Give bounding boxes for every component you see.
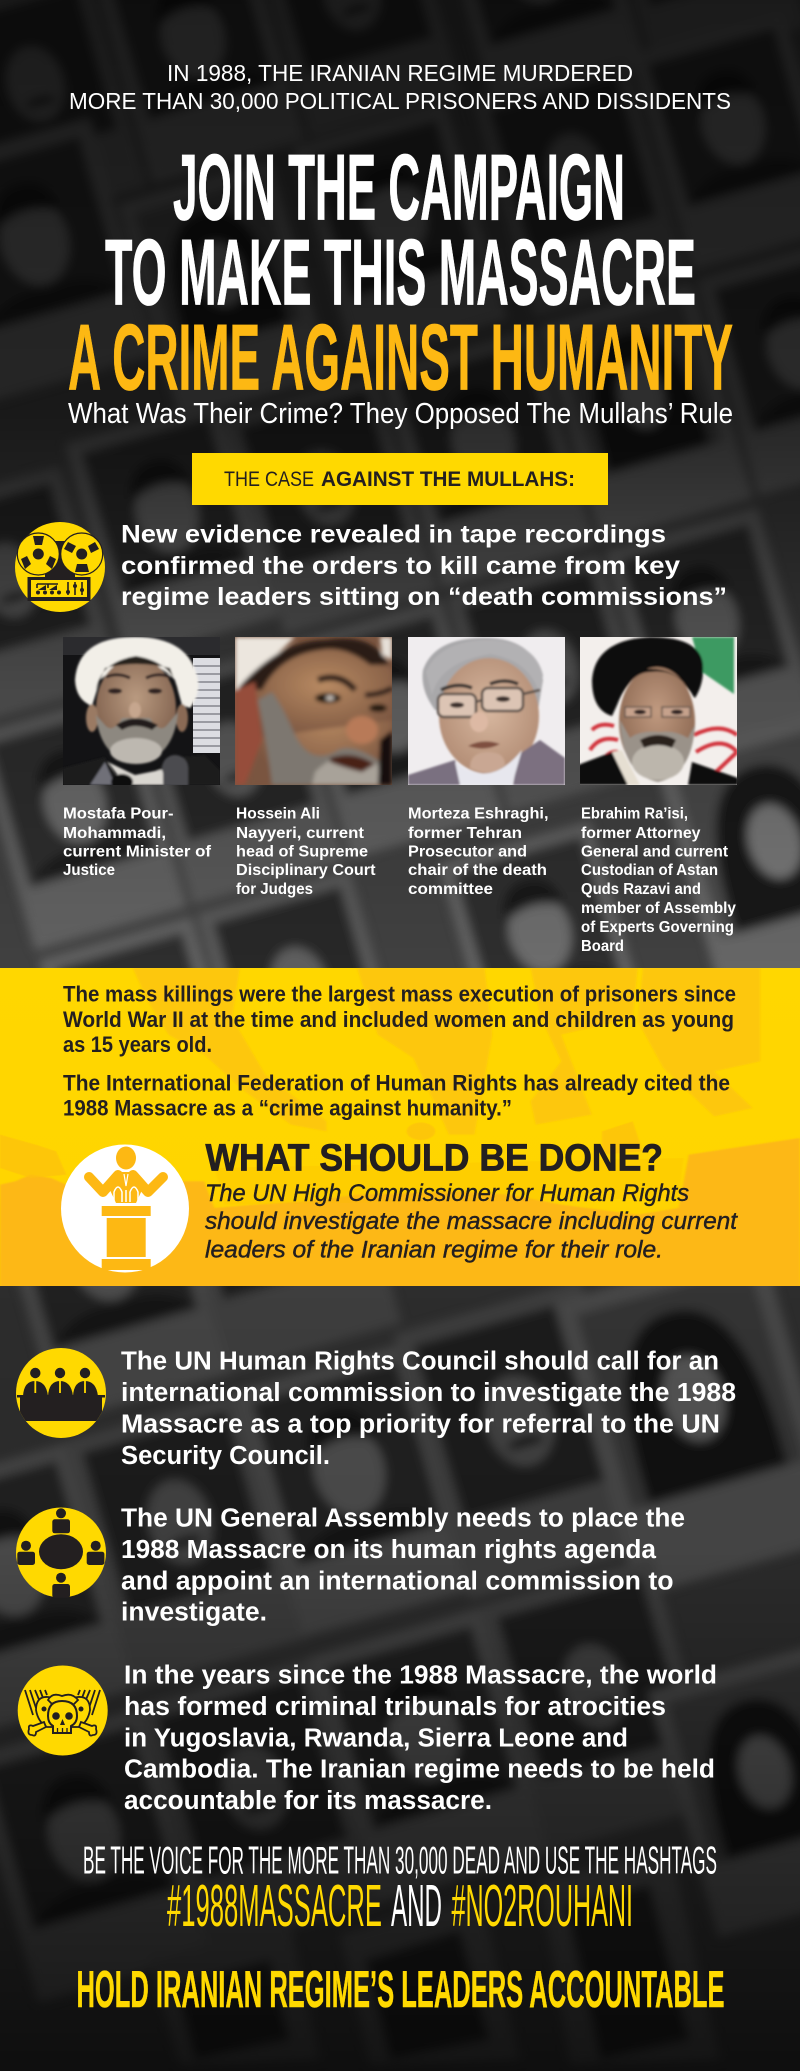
- text: UN Human Rights Council: The UN Human Rights Council should call for an: [121, 1348, 719, 1376]
- captions under photos: [63, 806, 736, 955]
- icon: round table assembly: [16, 1508, 106, 1598]
- text: UN High Commissioner: The UN High Commissioner for Human Rights: [205, 1180, 689, 1207]
- banner: the case against the mullahs: AGAINST THE MULLAHS:: [321, 468, 575, 491]
- icon: speaker at podium: [61, 1144, 189, 1272]
- caption: Morteza Eshraghi: committee: [408, 881, 493, 898]
- icon: tape recorder: [15, 522, 105, 612]
- heading: what should be done: WHAT SHOULD BE DONE?: [206, 1138, 663, 1180]
- text: UN General Assembly: investigate.: [121, 1598, 267, 1626]
- text: international federation: [63, 1070, 730, 1120]
- text: new evidence: New evidence revealed in tape recordings: [121, 520, 666, 548]
- panel: yellow call-to-action band: [0, 968, 800, 1288]
- text: new evidence: [121, 520, 727, 611]
- text: mass killings: World War II at the time and included women and children as young: [63, 1007, 734, 1032]
- caption: Ebrahim Ra'isi: Custodian of Astan: [581, 862, 718, 879]
- text: new evidence: regime leaders sitting on “death commissions”: [121, 583, 727, 611]
- caption: Ebrahim Ra'isi: Board: [581, 938, 624, 955]
- text: UN General Assembly: 1988 Massacre on its human rights agenda: [121, 1536, 657, 1564]
- caption: Morteza Eshraghi: former Tehran: [408, 825, 522, 842]
- caption: Mostafa Pour-Mohammadi: [63, 806, 212, 879]
- caption: Hossein Ali Nayyeri: Nayyeri, current: [236, 825, 364, 842]
- caption: Ebrahim Ra'isi: Quds Razavi and: [581, 881, 701, 898]
- caption: Mostafa Pour-Mohammadi: Mostafa Pour-: [63, 806, 174, 822]
- text: criminal tribunals: Cambodia. The Iranian regime needs to be held: [124, 1756, 715, 1784]
- caption: Ebrahim Ra'isi: member of Assembly: [581, 900, 736, 917]
- caption: Morteza Eshraghi: Morteza Eshraghi,: [408, 806, 548, 822]
- caption: Mostafa Pour-Mohammadi: Justice: [63, 862, 115, 879]
- caption: Hossein Ali Nayyeri: head of Supreme: [236, 844, 368, 860]
- caption: Ebrahim Ra'isi: [581, 806, 736, 955]
- icon: commission panel: [16, 1348, 106, 1438]
- banner: the case against the mullahs: THE CASE: [224, 468, 314, 491]
- photo: Ebrahim Ra'isi: [578, 637, 738, 785]
- text: UN Human Rights Council: Security Council.: [121, 1442, 330, 1470]
- caption: Hossein Ali Nayyeri: Disciplinary Court: [236, 862, 376, 879]
- call to action: hashtags: AND: [391, 1873, 442, 1939]
- call to action: hashtags: #1988MASSACRE: [167, 1873, 382, 1939]
- text: criminal tribunals: [124, 1662, 717, 1815]
- text: UN Human Rights Council: Massacre as a top priority for referral to the UN: [121, 1410, 720, 1438]
- caption: Morteza Eshraghi: [408, 806, 548, 898]
- caption: Ebrahim Ra'isi: of Experts Governing: [581, 919, 734, 936]
- text: UN Human Rights Council: [121, 1348, 736, 1470]
- intro text: [69, 60, 731, 114]
- text: UN Human Rights Council: international commission to investigate the 1988: [121, 1379, 736, 1407]
- caption: Hossein Ali Nayyeri: Hossein Ali: [236, 806, 320, 822]
- caption: Ebrahim Ra'isi: General and current: [581, 844, 728, 860]
- caption: Mostafa Pour-Mohammadi: Mohammadi,: [63, 825, 166, 842]
- text: UN General Assembly: [121, 1504, 685, 1626]
- photo: Mostafa Pour-Mohammadi: [63, 637, 220, 790]
- caption: Hossein Ali Nayyeri: for Judges: [236, 881, 313, 898]
- banner: the case against the mullahs: [192, 453, 608, 505]
- icon: skulls and bones: [18, 1666, 108, 1756]
- caption: Morteza Eshraghi: Prosecutor and: [408, 844, 527, 860]
- text: UN General Assembly: The UN General Assembly needs to place the: [121, 1504, 685, 1532]
- text: UN High Commissioner: [205, 1180, 738, 1264]
- caption: Hossein Ali Nayyeri: [236, 806, 376, 898]
- text: mass killings: The mass killings were the largest mass execution of prisoners since: [63, 982, 736, 1006]
- text: criminal tribunals: in Yugoslavia, Rwanda, Sierra Leone and: [124, 1724, 628, 1752]
- text: UN High Commissioner: leaders of the Iranian regime for their role.: [205, 1236, 663, 1264]
- intro text: MORE THAN 30,000 POLITICAL PRISONERS AND DISSIDENTS: [69, 88, 731, 114]
- text: international federation: The International Federation of Human Rights has already cited the: [63, 1070, 730, 1096]
- call to action: hashtags: [83, 1840, 717, 1939]
- text: UN General Assembly: and appoint an international commission to: [121, 1568, 674, 1596]
- caption: Mostafa Pour-Mohammadi: current Minister of: [63, 844, 212, 860]
- photo: Morteza Eshraghi: [408, 637, 565, 785]
- text: new evidence: confirmed the orders to kill came from key: [121, 552, 680, 580]
- text: mass killings: as 15 years old.: [63, 1032, 212, 1057]
- caption: Ebrahim Ra'isi: former Attorney: [581, 825, 701, 842]
- photo: Hossein Ali Nayyeri: [235, 637, 392, 785]
- text: criminal tribunals: has formed criminal tribunals for atrocities: [124, 1693, 666, 1721]
- intro text: IN 1988, THE IRANIAN REGIME MURDERED: [167, 60, 633, 86]
- caption: Ebrahim Ra'isi: Ebrahim Ra’isi,: [581, 806, 688, 822]
- caption: Morteza Eshraghi: chair of the death: [408, 862, 547, 879]
- text: mass killings: [63, 982, 736, 1057]
- text: criminal tribunals: accountable for its massacre.: [124, 1787, 492, 1815]
- title: [68, 134, 733, 410]
- text: international federation: 1988 Massacre as a “crime against humanity.”: [63, 1096, 512, 1120]
- subtitle: What Was Their Crime? They Opposed The Mullahs’ Rule: [68, 398, 733, 430]
- text: criminal tribunals: In the years since the 1988 Massacre, the world: [124, 1662, 717, 1690]
- text: UN High Commissioner: should investigate the massacre including current: [205, 1208, 738, 1235]
